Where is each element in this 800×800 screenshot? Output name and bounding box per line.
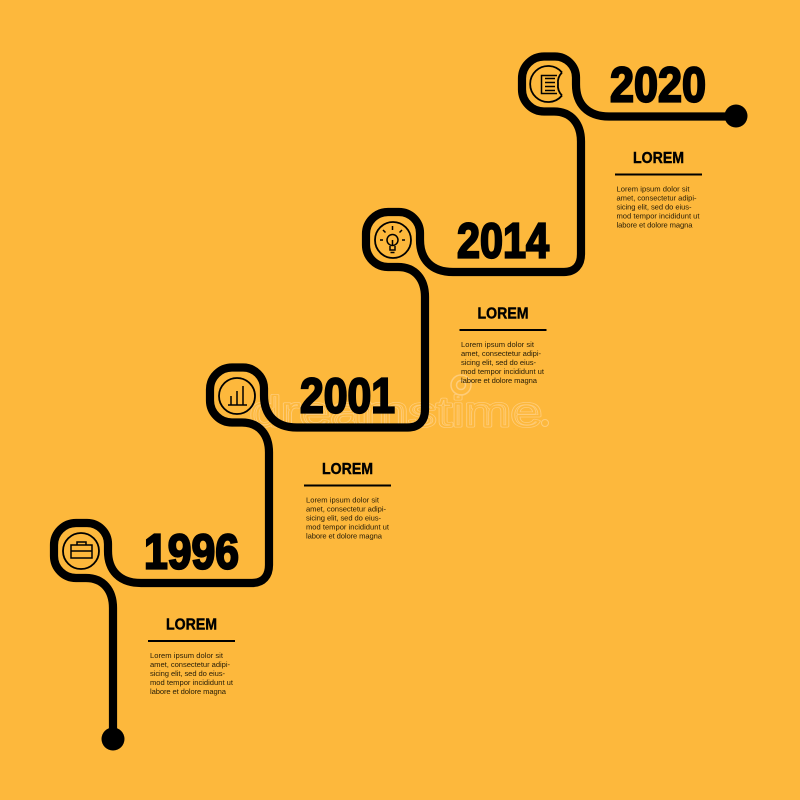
text 2020: amet, consectetur adipi- — [616, 194, 697, 202]
rule 2020 — [615, 174, 702, 176]
year 1996: 1996 — [144, 524, 239, 580]
text 2020: Lorem ipsum dolor sit — [616, 184, 690, 194]
year 2020: 2020 — [610, 58, 706, 112]
end dot — [724, 104, 748, 128]
text 1996: Lorem ipsum dolor sit — [150, 651, 224, 660]
text 2001: mod tempor incididunt ut — [306, 522, 390, 532]
text 2014: amet, consectetur adipi- — [461, 349, 541, 358]
watermark: dreamstime — [250, 388, 542, 435]
rule 2014 — [460, 329, 546, 331]
text 2014: sicing elit, sed do eius- — [461, 358, 536, 367]
watermark: dreamstime — [250, 388, 542, 435]
milestone 2014 — [375, 214, 549, 385]
start dot — [102, 728, 124, 750]
text 1996: mod tempor incididunt ut — [150, 678, 234, 687]
milestone 2001 — [219, 368, 395, 540]
icon: bar chart — [219, 378, 255, 414]
text 2020: mod tempor incididunt ut — [616, 212, 700, 220]
heading 1996: LOREM — [166, 616, 217, 634]
rule 2001 — [304, 484, 391, 486]
text 2001: Lorem ipsum dolor sit — [306, 496, 380, 504]
text 2020: sicing elit, sed do eius- — [616, 202, 692, 212]
icon: document — [530, 66, 562, 102]
icon: light bulb — [375, 222, 411, 258]
text 1996: labore et dolore magna — [150, 687, 227, 696]
timeline line — [54, 56, 736, 739]
text 1996: amet, consectetur adipi- — [150, 660, 230, 669]
year 2001: 2001 — [300, 368, 395, 424]
text 2014: labore et dolore magna — [461, 376, 538, 385]
text 2001: amet, consectetur adipi- — [306, 504, 386, 514]
icon: briefcase — [63, 533, 99, 569]
text 2014: Lorem ipsum dolor sit — [461, 340, 535, 349]
text 2001: labore et dolore magna — [306, 532, 383, 540]
milestone 1996 — [63, 524, 239, 696]
watermark — [250, 375, 548, 435]
text 1996: sicing elit, sed do eius- — [150, 669, 225, 678]
year 2014: 2014 — [457, 214, 549, 268]
heading 2020: LOREM — [633, 150, 684, 167]
text 2001: sicing elit, sed do eius- — [306, 514, 381, 522]
text 2020: labore et dolore magna — [616, 220, 693, 230]
heading 2014: LOREM — [478, 306, 528, 322]
rule 1996 — [148, 640, 235, 642]
text 2014: mod tempor incididunt ut — [461, 367, 545, 376]
heading 2001: LOREM — [322, 461, 373, 478]
milestone 2020 — [530, 58, 706, 230]
